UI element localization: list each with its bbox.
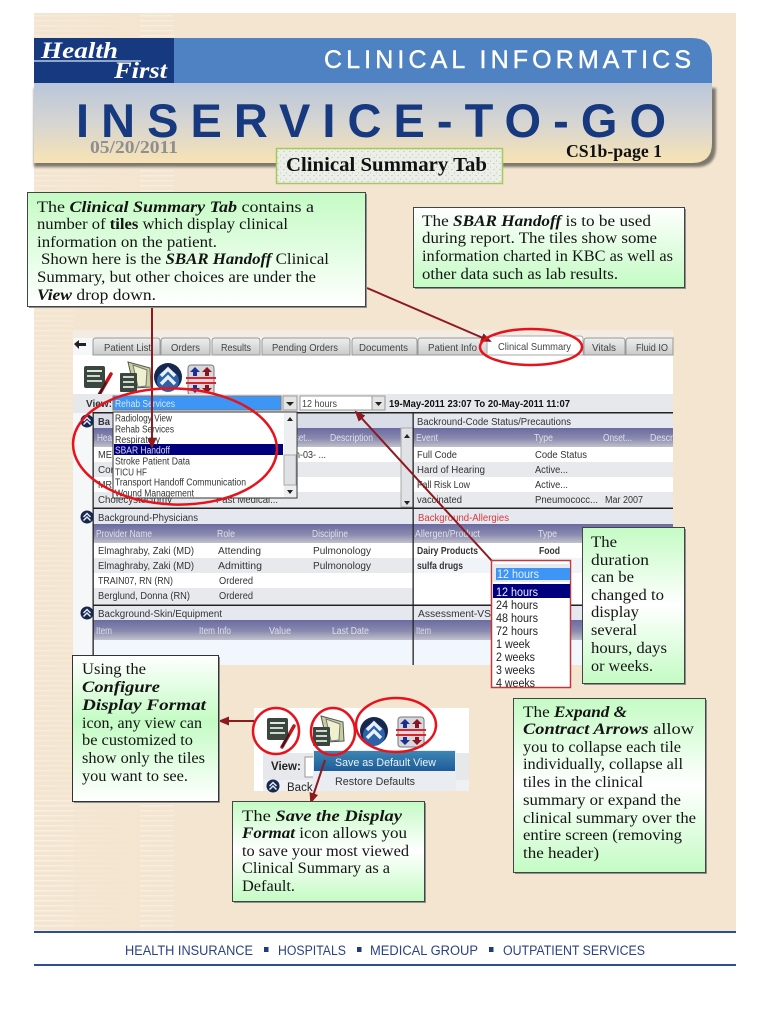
callout: Expand and Contract Arrows description: individually, collapse all — [523, 756, 684, 773]
view dropdown list: SBAR Handoff — [115, 446, 170, 456]
view dropdown list: Radiology View — [115, 414, 173, 424]
arrow: configure icon to callout — [220, 720, 254, 722]
tile: Background medical history: set... — [295, 433, 312, 444]
main screenshot: clinical summary screen — [73, 330, 674, 665]
tile: Background medical history: Cholecystectomy — [98, 495, 172, 506]
tile: Code Status/Precautions: Active... — [535, 480, 568, 491]
highlight ellipse: expand and contract arrows — [356, 698, 436, 752]
highlight ellipse: configure icon — [253, 708, 299, 754]
tile: Background-Skin/Equipment: Last Date — [332, 626, 369, 637]
callout: Expand and Contract Arrows description: entire screen (removing — [523, 827, 682, 844]
tile: Code Status/Precautions: Active... — [535, 465, 568, 476]
logo: Health First: First — [113, 58, 168, 83]
tile: Background medical history: n-03- ... — [295, 450, 326, 461]
tile: Code Status/Precautions — [413, 413, 674, 507]
context menu: save as default: Restore Defaults — [335, 776, 415, 788]
callout: SBAR Handoff description — [414, 208, 686, 289]
tile: Background-Allergies: Type — [538, 529, 557, 540]
tile: Background medical history: Past Medical... — [216, 495, 278, 506]
tile: Code Status/Precautions: Event — [416, 433, 438, 444]
footer: HOSPITALS — [278, 943, 346, 958]
view dropdown list: Respiratory — [115, 435, 160, 446]
tile: Background-Skin/Equipment: Item — [96, 626, 112, 637]
tile: Background medical history: Hea — [97, 433, 112, 444]
highlight ellipse: save display format icon — [311, 708, 355, 755]
footer: HEALTH INSURANCE — [125, 943, 253, 958]
callout: duration description — [582, 528, 686, 685]
callout: duration description: The — [591, 534, 617, 551]
view selector row: Rehab Services — [115, 399, 175, 410]
callout: duration description: can be — [591, 569, 634, 586]
tile: Code Status/Precautions: Descr — [650, 433, 674, 444]
callout: Expand and Contract Arrows description: summary or expand the — [523, 792, 681, 809]
duration dropdown image — [492, 560, 570, 690]
subtitle box: Clinical Summary Tab: Clinical Summary Tab — [286, 154, 487, 176]
tile: Background-Allergies — [413, 509, 673, 604]
tile: Background-Physicians: Ordered — [219, 591, 253, 602]
callout: Expand and Contract Arrows description: you to collapse each tile — [523, 739, 681, 756]
callout: Expand and Contract Arrows description: Contract Arrows allow — [523, 721, 695, 738]
toolbar screenshot close-up: View: — [271, 761, 301, 773]
tile: Background-Allergies: Allergen/Product — [415, 529, 480, 540]
toolbar screenshot close-up: Back — [287, 782, 313, 794]
tile: Background-Skin/Equipment: Item Info — [199, 626, 231, 637]
tile: Background-Physicians: Background-Physicians — [98, 513, 198, 524]
callout: Clinical Summary Tab description — [28, 192, 367, 308]
callout: Clinical Summary Tab description: Shown here is the SBAR Handoff Clinical — [41, 251, 330, 268]
logo: Health First — [34, 38, 174, 83]
tile: Background-Allergies: sulfa drugs — [417, 561, 463, 572]
tile: Background-Allergies: Dairy Products — [417, 546, 478, 557]
footer: OUTPATIENT SERVICES — [503, 943, 645, 958]
tile: Background-Allergies: Food — [539, 546, 560, 557]
callout: Expand and Contract Arrows description: tiles in the clinical — [523, 774, 644, 791]
arrow: duration dropdown to hours selector — [356, 412, 492, 561]
callout: Configure Display Format description: be customized to — [82, 732, 193, 749]
tile: Code Status/Precautions: Pneumococc... — [535, 495, 598, 506]
view dropdown list: TICU HF — [115, 468, 147, 478]
footer: MEDICAL GROUP — [370, 943, 478, 958]
highlight ellipse: Clinical Summary tab — [480, 329, 582, 365]
callout: Clinical Summary Tab description: information on the patient. — [37, 234, 217, 251]
callout: Clinical Summary Tab description: View drop down. — [37, 287, 156, 304]
view selector row: 19-May-2011 23:07 To 20-May-2011 11:07 — [389, 399, 570, 410]
duration dropdown image: 2 weeks — [496, 652, 535, 664]
tab row: Patient Info — [428, 342, 477, 354]
duration dropdown image: 1 week — [496, 639, 530, 651]
tile: Code Status/Precautions: Mar 2007 — [605, 495, 643, 506]
tile: Background-Skin/Equipment: Value — [269, 626, 291, 637]
callout: Expand and Contract Arrows description: the header) — [523, 845, 599, 862]
callout: Clinical Summary Tab description: The Clinical Summary Tab contains a — [37, 199, 314, 216]
tile: Background-Physicians: Pulmonology — [313, 546, 371, 557]
callout: Save the Display Format description — [232, 802, 426, 903]
duration dropdown image: 3 weeks — [496, 665, 535, 677]
date: 05/20/2011 — [90, 137, 178, 157]
callout: Expand and Contract Arrows description — [514, 698, 707, 874]
subtitle box: Clinical Summary Tab — [276, 148, 502, 184]
tab row: Documents — [359, 342, 408, 354]
callout: SBAR Handoff description: other data such as lab results. — [422, 266, 618, 283]
callout: Save the Display Format description: The Save the Display — [242, 808, 403, 825]
callout: Configure Display Format description: you want to see. — [82, 768, 188, 785]
callout: Clinical Summary Tab description: number of tiles which display clinical — [37, 216, 289, 233]
toolbar screenshot close-up — [254, 708, 469, 794]
view dropdown list: Rehab Services — [115, 424, 174, 436]
view dropdown list: Wound Management — [115, 488, 194, 500]
tile: Code Status/Precautions: Code Status — [535, 450, 587, 461]
tab row: Pending Orders — [272, 342, 338, 354]
callout: duration description: or weeks. — [591, 658, 653, 675]
tab row: Results — [221, 342, 251, 354]
tile: Background-Physicians: Berglund, Donna (RN) — [98, 591, 190, 602]
duration dropdown image: 48 hours — [496, 613, 538, 625]
tile: Background medical history: Cor — [98, 465, 115, 476]
tab row: Vitals — [592, 342, 616, 354]
arrow: View callout to SBAR Handoff — [151, 306, 153, 447]
tile: Code Status/Precautions: vaccinated — [417, 495, 462, 506]
callout: Configure Display Format description: icon, any view can — [82, 715, 202, 732]
tile: Code Status/Precautions: Backround-Code Status/Precautions — [417, 417, 571, 428]
tile: Background-Allergies: Background-Allergies — [418, 513, 509, 524]
tile: Background-Physicians: Admitting — [218, 561, 262, 572]
banner gradient band — [34, 83, 712, 163]
tile: Background medical history: MR — [98, 480, 112, 491]
tile: Assessment-VS — [413, 606, 673, 665]
tile: Code Status/Precautions: Fall Risk Low — [417, 480, 471, 491]
callout: Expand and Contract Arrows description: The Expand & — [523, 704, 628, 721]
duration dropdown image: 72 hours — [496, 626, 538, 638]
view dropdown list: Stroke Patient Data — [115, 456, 190, 468]
callout: Configure Display Format description: Using the — [82, 661, 146, 678]
page id: CS1b-page 1 — [566, 141, 662, 161]
tab row: Clinical Summary — [498, 341, 572, 353]
tile: Background medical history: Description — [330, 433, 373, 444]
tab row: Patient List — [104, 342, 151, 354]
view selector row: 12 hours — [302, 398, 337, 410]
highlight ellipse: view dropdown — [71, 385, 279, 508]
banner shadow — [34, 88, 716, 167]
tile: Background medical history: Ba — [98, 417, 110, 428]
callout: Save the Display Format description: Format icon allows you — [241, 825, 407, 842]
tile: Background medical history: ME — [98, 450, 112, 461]
arrow: save icon to callout — [311, 760, 325, 802]
title: Inservice-To-Go: INSERVICE-TO-GO — [76, 94, 666, 147]
callout: Expand and Contract Arrows description: clinical summary over the — [523, 810, 696, 827]
view dropdown list — [113, 412, 297, 500]
tile: Code Status/Precautions: Hard of Hearing — [417, 465, 485, 476]
tile: Background-Physicians: Elmaghraby, Zaki (MD) — [98, 561, 194, 572]
duration dropdown image: 12 hours — [497, 569, 539, 581]
callout: Configure Display Format description: Configure — [82, 679, 160, 696]
logo: Health First: Health — [40, 38, 118, 63]
tab row: Orders — [171, 342, 200, 354]
callout: SBAR Handoff description: The SBAR Handoff is to be used — [422, 213, 651, 230]
callout: duration description: changed to — [591, 587, 664, 604]
tile: Background-Skin/Equipment — [93, 606, 413, 665]
tile: Background-Physicians: Discipline — [312, 529, 348, 540]
tile: Code Status/Precautions: Type — [534, 433, 553, 444]
tile: Background-Skin/Equipment: Background-Skin/Equipment — [98, 609, 222, 620]
callout: Configure Display Format description: show only the tiles — [82, 750, 205, 767]
callout: SBAR Handoff description: information charted in KBC as well as — [422, 248, 673, 265]
callout: SBAR Handoff description: during report. The tiles show some — [422, 230, 657, 247]
tile: Background-Physicians: TRAIN07, RN (RN) — [98, 576, 173, 587]
tile: Assessment-VS: Assessment-VS — [418, 609, 491, 620]
context menu: save as default — [313, 750, 456, 791]
header banner — [34, 38, 716, 167]
tile collapse icons — [80, 414, 94, 620]
duration dropdown image: 12 hours — [496, 587, 538, 599]
callout: duration description: several — [591, 622, 638, 639]
tile dividers and frame — [92, 412, 673, 665]
arrow: SBAR callout to Clinical Summary tab — [367, 288, 490, 341]
tile: Code Status/Precautions: Full Code — [417, 450, 457, 461]
toolbar icons close-up — [267, 716, 426, 747]
callout: Clinical Summary Tab description: Summary, but other choices are under the — [37, 269, 316, 286]
tile: Code Status/Precautions: Onset... — [603, 433, 632, 444]
callout: Save the Display Format description: Clinical Summary as a — [242, 860, 390, 877]
callout: Configure Display Format description: Display Format — [81, 697, 207, 714]
back arrow — [74, 340, 86, 349]
tab row: Fluid IO — [636, 342, 668, 354]
view selector row — [73, 394, 673, 413]
context menu: save as default: Save as Default View — [335, 757, 436, 769]
callout: Configure Display Format description — [72, 656, 220, 803]
view selector row: View: — [86, 399, 112, 410]
footer — [34, 931, 736, 966]
callout: Save the Display Format description: Default. — [242, 878, 295, 895]
callout: duration description: duration — [591, 552, 649, 569]
blue bar — [174, 38, 712, 83]
callout: duration description: display — [591, 604, 639, 621]
tile: Assessment-VS: Item — [416, 626, 431, 637]
toolbar icons — [84, 362, 216, 395]
tile: Background-Physicians — [93, 509, 413, 604]
tile: Background-Physicians: Provider Name — [96, 529, 152, 540]
duration dropdown image: 4 weeks — [496, 678, 535, 690]
tile: Background medical history — [93, 413, 413, 507]
heading: Clinical Informatics: CLINICAL INFORMATICS — [324, 46, 691, 74]
callout: duration description: hours, days — [591, 640, 667, 657]
tab row — [73, 336, 673, 394]
tile: Background-Physicians: Role — [217, 529, 235, 540]
callout: Save the Display Format description: to save your most viewed — [242, 843, 409, 860]
view dropdown list: Transport Handoff Communication — [115, 478, 246, 488]
tile: Background-Physicians: Elmaghraby, Zaki (MD) — [98, 546, 194, 557]
tile: Background-Physicians: Attending — [218, 546, 261, 557]
tile: Background-Physicians: Ordered — [219, 576, 253, 587]
tile: Background-Physicians: Pulmonology — [313, 561, 371, 572]
duration dropdown image: 24 hours — [496, 600, 538, 612]
